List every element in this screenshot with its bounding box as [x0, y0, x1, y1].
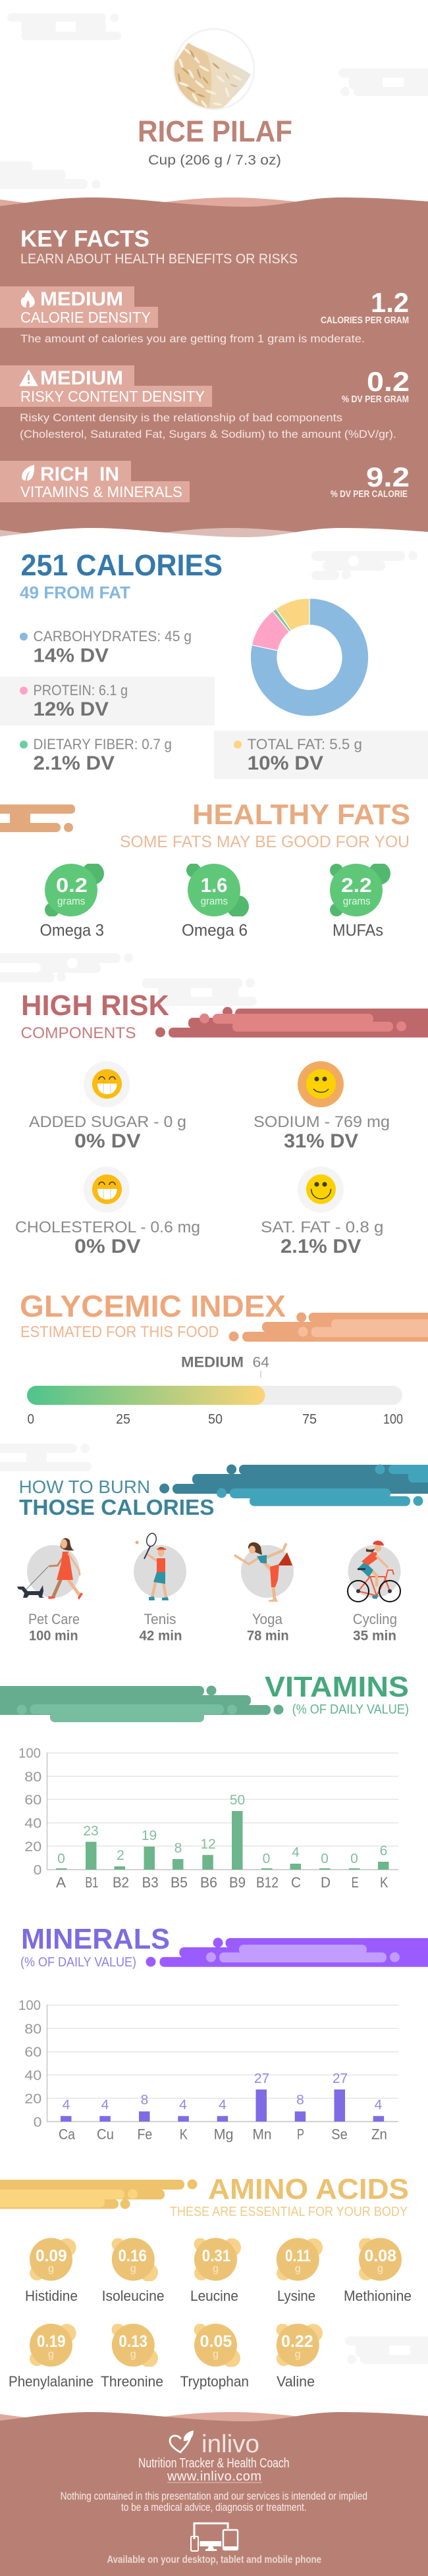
bar chart: minerals: 27 — [333, 2071, 348, 2086]
row: total fat: 10% DV — [248, 752, 323, 774]
bar chart: minerals: Mg — [214, 2126, 233, 2142]
badge: omega 6: Omega 6 — [182, 922, 248, 940]
amino: threonine: Threonine — [101, 2373, 163, 2390]
bar chart: vitamins: 0 — [34, 1862, 41, 1878]
item: added sugar: ADDED SUGAR - 0 g — [29, 1113, 186, 1131]
rating: MEDIUM — [40, 367, 123, 389]
bar chart: vitamins: C — [291, 1874, 301, 1891]
rating: RICH IN — [40, 463, 119, 485]
amino: phenylalanine: 0.19 — [37, 2332, 66, 2351]
icon: smiling face — [306, 1069, 336, 1099]
heading — [19, 1477, 214, 1519]
amino: phenylalanine: Phenylalanine — [9, 2373, 94, 2390]
fact: calorie density — [0, 286, 409, 345]
value: 1.2 — [371, 287, 409, 318]
panel: amino acids — [0, 2173, 412, 2390]
decorative brush — [155, 1007, 428, 1038]
activity: yoga: 78 min — [247, 1629, 289, 1643]
panel: high risk components — [15, 989, 428, 1257]
amino: phenylalanine — [9, 2324, 94, 2390]
badge: MUFAs: MUFAs — [333, 922, 383, 940]
decorative cloud: left of high risk — [0, 953, 133, 982]
bar chart: vitamins: 6 — [380, 1843, 387, 1858]
bar chart: vitamins: 19 — [142, 1828, 157, 1843]
gauge scale: 25 — [116, 1411, 130, 1427]
amino: threonine: 0.13 — [119, 2332, 147, 2351]
fact: rich in vitamins and minerals — [0, 461, 410, 502]
gauge scale: 50 — [208, 1411, 223, 1427]
decorative cloud: left of title — [0, 161, 100, 189]
heading: key facts: KEY FACTS — [20, 226, 149, 251]
logo: inlivo heart — [170, 2431, 194, 2452]
amino: valine: 0.22 — [281, 2332, 313, 2351]
bar chart: minerals: 60 — [24, 2044, 41, 2060]
icon: leaf — [22, 465, 34, 481]
item: cholesterol: 0% DV — [74, 1236, 141, 1257]
activity: pet care: Pet Care — [28, 1611, 80, 1627]
panel: footer — [0, 2412, 428, 2576]
heading: THOSE CALORIES — [19, 1495, 215, 1519]
subheading: LEARN ABOUT HEALTH BENEFITS OR RISKS — [20, 251, 298, 267]
item: added sugar — [29, 1061, 186, 1152]
decorative brush — [229, 1313, 428, 1342]
unit: CALORIES PER GRAM — [321, 315, 409, 326]
subheading: SOME FATS MAY BE GOOD FOR YOU — [120, 833, 410, 851]
item: sodium: 31% DV — [284, 1130, 358, 1152]
badge: omega 6: 1.6 — [201, 874, 227, 897]
bar chart: vitamins: A — [56, 1874, 66, 1891]
row: protein — [0, 677, 215, 725]
amino: tryptophan: Tryptophan — [180, 2373, 249, 2390]
amino: tryptophan — [180, 2324, 249, 2390]
description: The amount of calories you are getting from 1 gram is moderate. — [20, 332, 365, 345]
bar chart: vitamins: B1 — [85, 1874, 98, 1891]
label: CALORIE DENSITY — [20, 309, 151, 326]
amino: histidine — [25, 2238, 78, 2304]
disclaimer: to be a medical advice, diagnosis or treatment. — [121, 2501, 307, 2513]
activity: cycling: 35 min — [353, 1629, 396, 1643]
item: added sugar: 0% DV — [74, 1130, 141, 1152]
row: carbohydrates — [20, 628, 192, 666]
bar chart: vitamins: B3 — [142, 1874, 159, 1891]
decorative cloud: burn calories — [0, 1444, 92, 1471]
decorative brush — [159, 1464, 428, 1506]
bar chart: vitamins: D — [321, 1874, 331, 1891]
subheading: from fat: 49 FROM FAT — [20, 583, 130, 602]
activity: pet care: 100 min — [29, 1629, 78, 1643]
gauge scale: 100 — [383, 1411, 403, 1427]
bar chart: minerals: 8 — [296, 2092, 304, 2108]
icon: yoga pose — [235, 1542, 292, 1602]
website link: www.inlivo.com — [167, 2469, 261, 2484]
availability note: Available on your desktop, tablet and mobile phone — [107, 2554, 321, 2565]
unit: % DV PER CALORIE — [331, 489, 408, 500]
badge: omega 3: 0.2 — [56, 874, 88, 897]
item: saturated fat: 2.1% DV — [281, 1236, 361, 1257]
row: protein: 12% DV — [33, 698, 109, 720]
bar chart: vitamins: B2 — [113, 1874, 129, 1891]
bar chart: vitamins: 0 — [321, 1851, 329, 1866]
gauge scale — [28, 1411, 403, 1427]
bar chart: vitamins: 0 — [57, 1851, 65, 1866]
bar chart: minerals: Zn — [371, 2126, 387, 2142]
heading: GLYCEMIC INDEX — [20, 1289, 286, 1323]
bar chart: minerals: 4 — [101, 2097, 109, 2113]
description: (Cholesterol, Saturated Fat, Sugars & Sodium) to the amount (%DV/gr). — [20, 428, 396, 440]
gauge bar — [27, 1386, 402, 1405]
description: Risky Content density is the relationship of bad components — [20, 411, 342, 424]
activity: tennis — [134, 1533, 186, 1643]
bar chart: minerals: 4 — [219, 2097, 227, 2113]
gauge scale: 0 — [28, 1411, 34, 1427]
amino: threonine: g — [130, 2349, 136, 2360]
amino: lysine — [277, 2238, 323, 2304]
activity: yoga: Yoga — [252, 1611, 283, 1627]
bar chart: minerals: Fe — [137, 2126, 152, 2142]
bar chart: minerals: Cu — [97, 2126, 114, 2142]
gauge label: MEDIUM — [181, 1354, 244, 1371]
bar chart: vitamins: 80 — [24, 1769, 41, 1785]
bar chart: minerals: Mn — [253, 2126, 271, 2142]
badge: MUFAs: 2.2 — [341, 874, 372, 897]
heading: calories: 251 CALORIES — [21, 548, 223, 582]
panel: minerals — [18, 1923, 428, 2142]
bar chart: minerals: 27 — [254, 2071, 269, 2086]
label: VITAMINS & MINERALS — [20, 483, 182, 500]
bar chart: vitamins: 23 — [83, 1824, 99, 1839]
item: sodium — [254, 1061, 390, 1152]
panel: healthy fats — [0, 799, 410, 940]
item: saturated fat: SAT. FAT - 0.8 g — [261, 1219, 383, 1236]
amino: leucine: 0.31 — [202, 2247, 230, 2265]
decorative brush — [0, 1685, 283, 1722]
amino: tryptophan: 0.05 — [200, 2332, 232, 2351]
bar chart: vitamins: 40 — [24, 1816, 41, 1831]
gauge label: 64 — [253, 1354, 269, 1371]
badge: MUFAs — [330, 862, 390, 940]
bar chart: vitamins: B6 — [200, 1874, 217, 1891]
amino: methionine: g — [377, 2263, 383, 2274]
bar chart: minerals: 20 — [24, 2091, 41, 2107]
item: sodium: SODIUM - 769 mg — [254, 1113, 390, 1131]
fact: risky content density — [0, 365, 410, 440]
bar chart: minerals: 80 — [24, 2021, 41, 2037]
amino: leucine: Leucine — [190, 2288, 238, 2304]
amino: leucine: g — [213, 2263, 219, 2274]
bar chart: vitamins: 4 — [292, 1845, 300, 1860]
decorative cloud: top left — [7, 13, 121, 40]
row: dietary fiber: DIETARY FIBER: 0.7 g — [33, 736, 172, 752]
bar chart: minerals: 0 — [34, 2115, 41, 2130]
heading: HEALTHY FATS — [192, 799, 410, 831]
gauge label — [181, 1354, 269, 1378]
decorative cloud: lower right — [345, 2336, 428, 2364]
amino: methionine: 0.08 — [365, 2247, 396, 2265]
heading: VITAMINS — [265, 1671, 409, 1703]
panel: vitamins — [0, 1671, 409, 1891]
panel: how to burn those calories — [17, 1464, 428, 1643]
description — [20, 411, 396, 440]
bar chart: vitamins: 100 — [18, 1745, 41, 1761]
amino: phenylalanine: g — [48, 2349, 54, 2360]
bar chart: minerals: 4 — [179, 2097, 187, 2113]
amino: histidine: Histidine — [25, 2288, 78, 2304]
panel: calories — [0, 548, 428, 779]
item: cholesterol: CHOLESTEROL - 0.6 mg — [15, 1219, 200, 1236]
icon: woman walking dog — [17, 1538, 83, 1600]
disclaimer — [61, 2490, 367, 2513]
bar chart: vitamins: B12 — [256, 1874, 279, 1891]
icon: cyclist — [348, 1540, 400, 1602]
bar chart: vitamins: 50 — [230, 1793, 245, 1808]
bar chart: minerals: 4 — [63, 2097, 70, 2113]
amino: lysine: g — [295, 2263, 301, 2274]
bar chart: vitamins: 0 — [263, 1851, 270, 1866]
bar chart: vitamins: 12 — [200, 1837, 216, 1852]
bar chart: minerals: P — [297, 2126, 304, 2142]
bar chart: vitamins: 0 — [350, 1851, 358, 1866]
bar chart: minerals: 8 — [141, 2092, 148, 2108]
amino: threonine — [101, 2324, 163, 2390]
amino: histidine: g — [48, 2263, 54, 2274]
amino: lysine: 0.11 — [285, 2247, 311, 2265]
activity: pet care — [17, 1538, 83, 1643]
subheading: (% OF DAILY VALUE) — [20, 1955, 136, 1970]
amino: histidine: 0.09 — [36, 2247, 67, 2265]
bar chart: minerals: Se — [331, 2126, 348, 2142]
bar chart: vitamins — [18, 1745, 398, 1891]
decorative brush — [0, 804, 75, 832]
icon: big smile face — [306, 1174, 336, 1204]
icon: tennis player — [136, 1533, 169, 1600]
activity: cycling: Cycling — [353, 1611, 397, 1627]
heading: HOW TO BURN — [19, 1477, 150, 1497]
logo: wordmark: inlivo — [201, 2431, 259, 2458]
amino: isoleucine — [102, 2238, 165, 2304]
icon: flame — [21, 290, 35, 307]
heading: HIGH RISK — [21, 989, 169, 1022]
amino: valine — [277, 2324, 323, 2390]
amino: leucine — [190, 2238, 241, 2304]
subheading: COMPONENTS — [21, 1024, 136, 1042]
bar chart: vitamins: B5 — [171, 1874, 188, 1891]
tagline: Nutrition Tracker & Health Coach — [138, 2456, 290, 2471]
row: total fat — [214, 731, 428, 779]
icon: warning triangle — [20, 370, 38, 386]
activity: tennis: 42 min — [140, 1629, 182, 1643]
decorative cloud: top right — [338, 68, 428, 96]
bar chart: vitamins: K — [380, 1874, 388, 1891]
row: dietary fiber: 2.1% DV — [33, 752, 115, 774]
donut chart: macronutrients — [250, 598, 369, 716]
row: total fat: TOTAL FAT: 5.5 g — [248, 736, 362, 752]
row: carbohydrates: CARBOHYDRATES: 45 g — [33, 628, 192, 644]
bar chart: vitamins: 60 — [24, 1792, 41, 1808]
amino: methionine — [344, 2238, 412, 2304]
amino: lysine: Lysine — [277, 2288, 315, 2304]
bar chart: vitamins: 20 — [24, 1839, 41, 1854]
subheading: ESTIMATED FOR THIS FOOD — [20, 1323, 219, 1341]
bar chart: vitamins: B9 — [229, 1874, 246, 1891]
title: RICE PILAF — [138, 115, 292, 148]
amino: isoleucine: g — [130, 2263, 136, 2274]
subheading: THESE ARE ESSENTIAL FOR YOUR BODY — [170, 2205, 408, 2219]
row: carbohydrates: 14% DV — [33, 645, 109, 666]
label: RISKY CONTENT DENSITY — [20, 388, 205, 405]
decorative cloud: calories — [311, 551, 417, 580]
amino: isoleucine: Isoleucine — [102, 2288, 165, 2304]
amino: tryptophan: g — [213, 2349, 219, 2360]
amino: isoleucine: 0.16 — [119, 2247, 147, 2265]
rating: MEDIUM — [40, 288, 123, 310]
row: dietary fiber — [20, 736, 172, 774]
bar chart: minerals: K — [180, 2126, 188, 2142]
amino: valine: g — [295, 2349, 301, 2360]
badge: omega 3: Omega 3 — [40, 922, 104, 940]
decorative brush — [146, 1938, 428, 1967]
gauge scale: 75 — [302, 1411, 317, 1427]
food image: rice pilaf — [173, 29, 254, 110]
bar chart: minerals: Ca — [59, 2126, 76, 2142]
value: 9.2 — [366, 461, 410, 492]
amino: valine: Valine — [277, 2373, 315, 2390]
bar chart: minerals: 100 — [18, 1997, 41, 2013]
subheading: (% OF DAILY VALUE) — [292, 1702, 409, 1717]
bar chart: minerals: 40 — [24, 2067, 41, 2083]
bar chart: minerals: 4 — [375, 2097, 383, 2113]
heading: MINERALS — [21, 1923, 170, 1955]
panel: key facts — [0, 197, 428, 544]
badge: omega 6: grams — [201, 896, 228, 907]
badge: omega 3 — [40, 862, 104, 940]
icon: devices — [191, 2523, 238, 2551]
serving size: Cup (206 g / 7.3 oz) — [148, 153, 281, 168]
badge: omega 3: grams — [57, 896, 85, 907]
decorative brush — [0, 2179, 198, 2209]
bar chart: minerals — [18, 1997, 398, 2142]
bar chart: vitamins: 8 — [174, 1841, 182, 1856]
activity: tennis: Tenis — [144, 1611, 176, 1627]
activity: cycling — [348, 1540, 400, 1643]
heading: AMINO ACIDS — [208, 2173, 409, 2205]
icon: grinning face — [92, 1174, 122, 1204]
bar chart: vitamins: E — [352, 1874, 359, 1891]
row: protein: PROTEIN: 6.1 g — [33, 682, 128, 698]
unit: % DV PER GRAM — [342, 394, 409, 405]
panel: glycemic index — [20, 1289, 428, 1427]
badge: omega 6 — [182, 863, 249, 940]
decorative cloud: right of high risk — [142, 978, 257, 1006]
activity: yoga — [235, 1542, 294, 1643]
item: cholesterol — [15, 1167, 200, 1257]
item: saturated fat — [261, 1167, 383, 1257]
badge: MUFAs: grams — [343, 896, 371, 907]
bar chart: vitamins: 2 — [117, 1848, 124, 1863]
value: 0.2 — [367, 366, 410, 397]
icon: grinning face — [92, 1069, 122, 1099]
amino: methionine: Methionine — [344, 2288, 412, 2304]
